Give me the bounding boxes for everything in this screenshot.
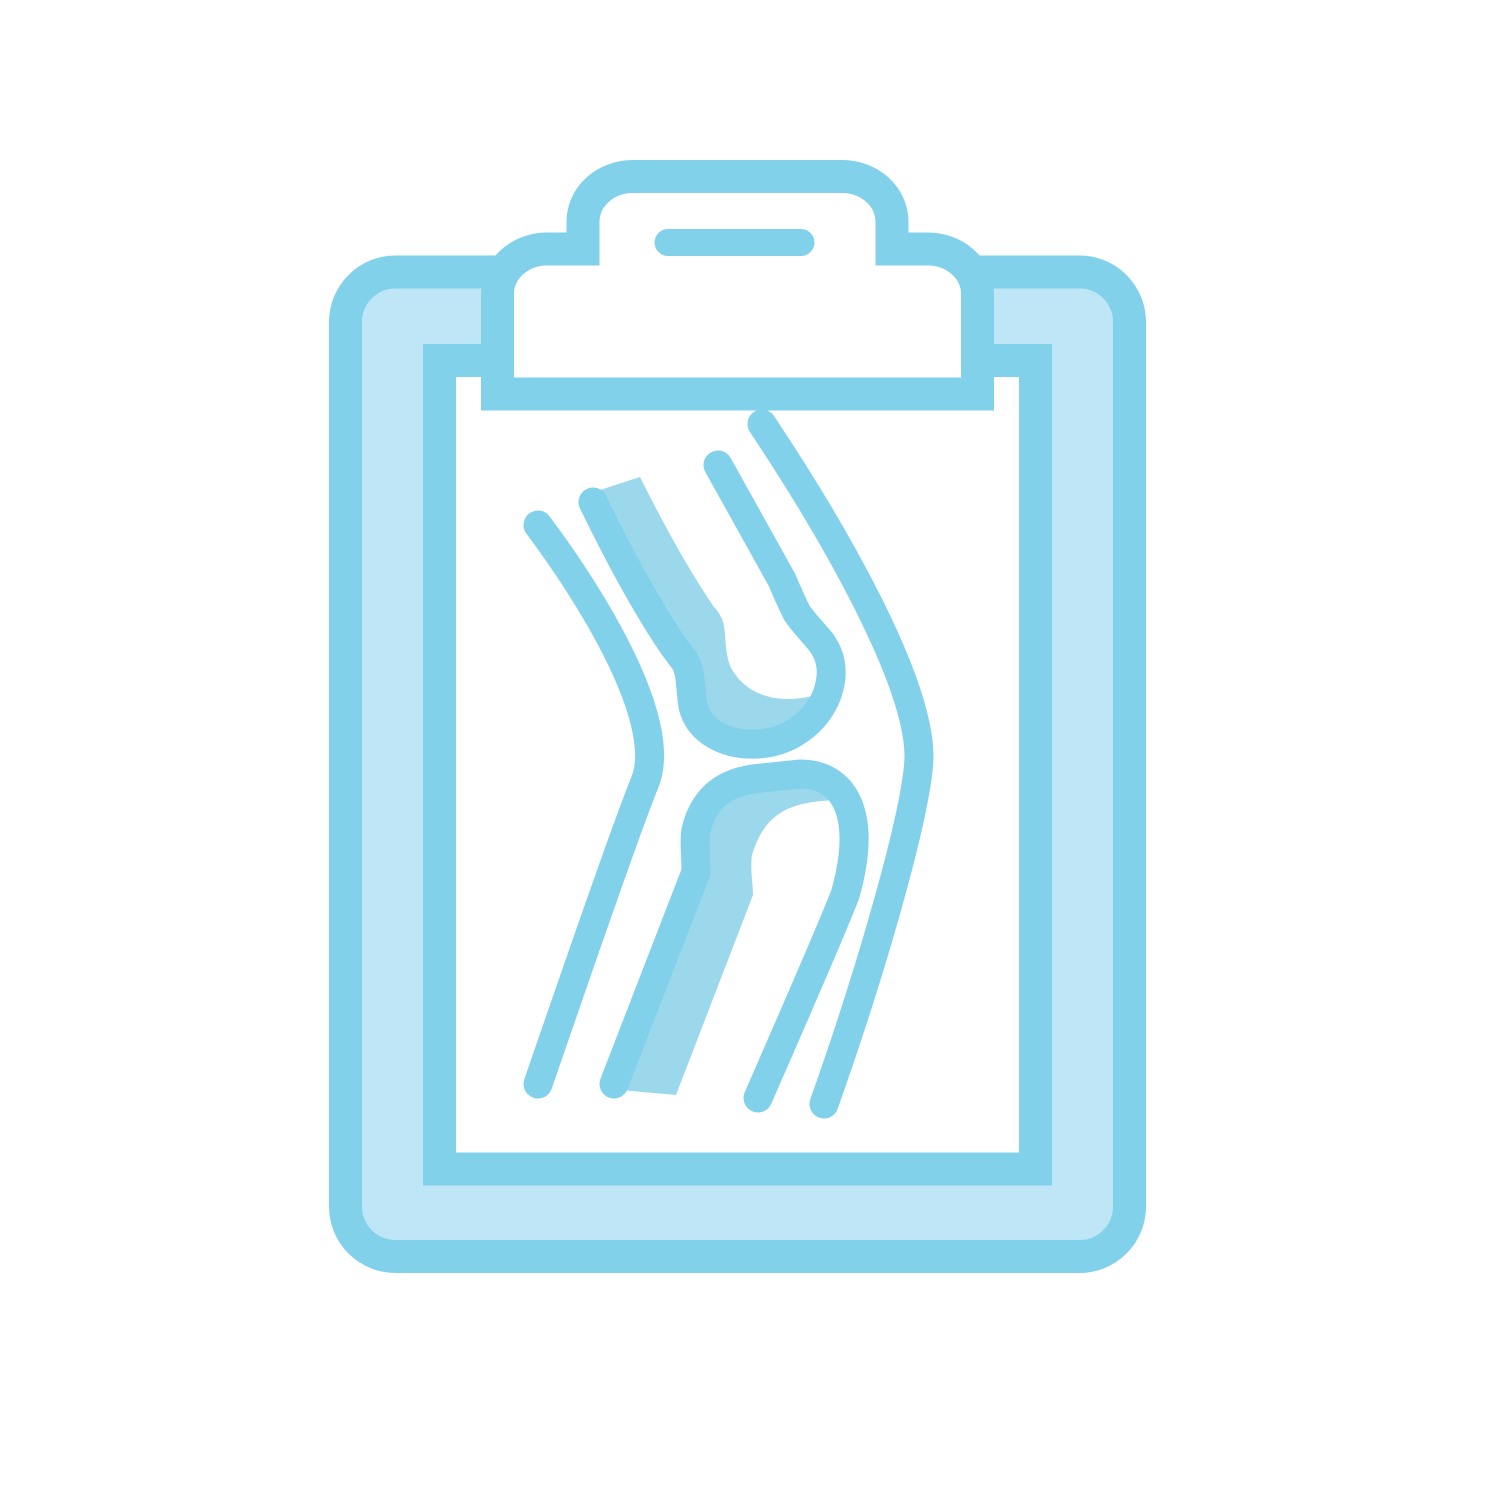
- back of leg outline: [538, 525, 650, 1084]
- tibia shading: [620, 786, 836, 1095]
- femur shading: [594, 477, 826, 748]
- front of leg outline: [762, 424, 919, 1104]
- x-ray sheet: [440, 360, 1036, 1169]
- clipboard board: [346, 272, 1130, 1256]
- clipboard clip: [498, 176, 978, 394]
- femur: [593, 465, 831, 744]
- tibia: [614, 774, 854, 1098]
- knee bone outlines: [538, 424, 919, 1104]
